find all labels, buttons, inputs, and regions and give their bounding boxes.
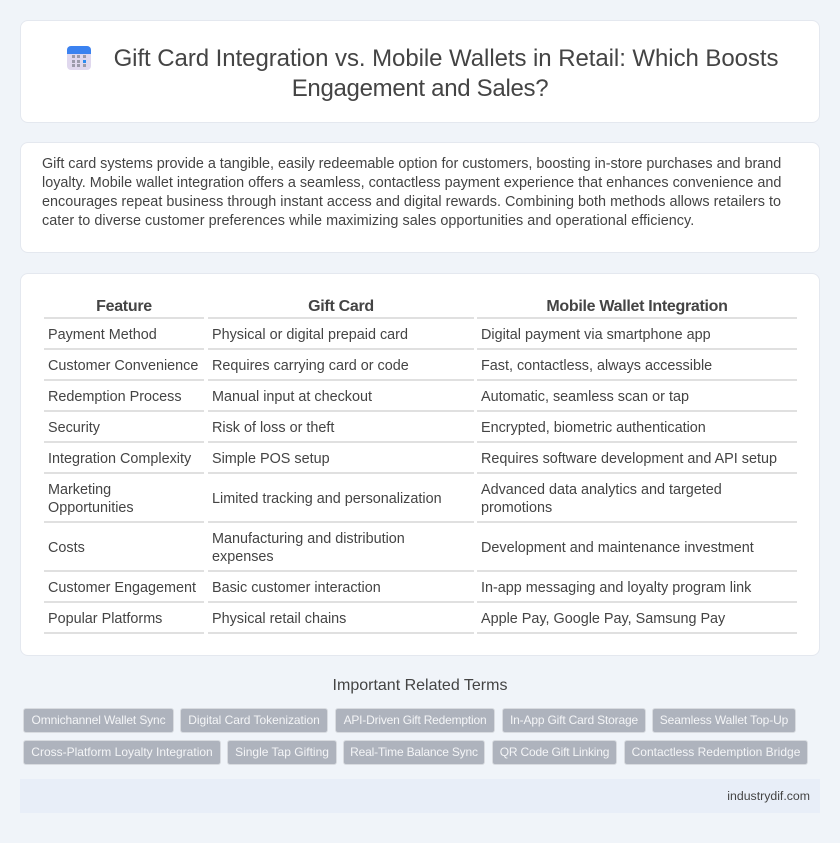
table rows: Risk of loss or theft	[212, 420, 334, 436]
intro paragraph: loyalty. Mobile wallet integration offers a seamless, contactless payment experience that enhances convenience and	[42, 175, 781, 191]
table rows: Security	[48, 420, 100, 436]
table rows: Simple POS setup	[212, 451, 330, 467]
table header: Gift Card	[308, 298, 374, 315]
table rows: Opportunities	[48, 500, 134, 516]
table rows: In-app messaging and loyalty program link	[481, 580, 751, 596]
related term tags: QR Code Gift Linking	[500, 745, 609, 759]
related term tags: Digital Card Tokenization	[188, 713, 320, 727]
panel: intro text	[20, 142, 820, 253]
related term tags: Single Tap Gifting	[235, 745, 329, 759]
panel: title card	[20, 20, 820, 123]
table rows: Apple Pay, Google Pay, Samsung Pay	[481, 611, 725, 627]
table rows: Requires software development and API setup	[481, 451, 777, 467]
table rows: Physical or digital prepaid card	[212, 327, 408, 343]
footer source: industrydif.com	[727, 789, 810, 803]
related term tags: API-Driven Gift Redemption	[344, 713, 486, 727]
table rows: Development and maintenance investment	[481, 540, 754, 556]
table rows: Manufacturing and distribution	[212, 531, 405, 547]
table rows: Automatic, seamless scan or tap	[481, 389, 689, 405]
intro paragraph: encourages repeat business through instant access and digital rewards. Combining both methods allows retailers to	[42, 194, 781, 210]
table rows: Customer Convenience	[48, 358, 198, 374]
table rows: Marketing	[48, 482, 111, 498]
table rows	[44, 317, 797, 634]
panel: comparison table	[20, 273, 820, 656]
related term tags	[23, 708, 808, 765]
table rows: Costs	[48, 540, 85, 556]
table rows: Integration Complexity	[48, 451, 191, 467]
related term tags: Omnichannel Wallet Sync	[32, 713, 165, 727]
table rows: Customer Engagement	[48, 580, 196, 596]
intro paragraph: Gift card systems provide a tangible, easily redeemable option for customers, boosting in-store purchases and brand	[42, 156, 781, 172]
table rows: Manual input at checkout	[212, 389, 372, 405]
intro paragraph	[42, 156, 781, 229]
title: Engagement and Sales?	[292, 75, 548, 102]
related term tags: Cross-Platform Loyalty Integration	[31, 745, 213, 759]
table rows: expenses	[212, 549, 274, 565]
table header: Mobile Wallet Integration	[546, 298, 728, 315]
table rows: Requires carrying card or code	[212, 358, 409, 374]
related term tags: In-App Gift Card Storage	[510, 713, 638, 727]
table rows: Advanced data analytics and targeted	[481, 482, 722, 498]
title	[114, 45, 778, 102]
table header	[96, 298, 728, 315]
title: Gift Card Integration vs. Mobile Wallets in Retail: Which Boosts	[114, 45, 778, 72]
table rows: Basic customer interaction	[212, 580, 381, 596]
table rows: Physical retail chains	[212, 611, 346, 627]
table rows: promotions	[481, 500, 552, 516]
related term tags: Contactless Redemption Bridge	[632, 745, 800, 759]
heading: related terms: Important Related Terms	[333, 677, 507, 694]
related term tags: Seamless Wallet Top-Up	[660, 713, 788, 727]
table rows: Redemption Process	[48, 389, 182, 405]
table rows: Payment Method	[48, 327, 157, 343]
table rows: Popular Platforms	[48, 611, 162, 627]
table rows: Fast, contactless, always accessible	[481, 358, 712, 374]
related term tags: Real-Time Balance Sync	[350, 745, 478, 759]
intro paragraph: cater to diverse customer preferences while maximizing sales opportunities and operational efficiency.	[42, 213, 694, 229]
footer bar	[20, 779, 820, 813]
table header: Feature	[96, 298, 152, 315]
table rows: Encrypted, biometric authentication	[481, 420, 706, 436]
table rows: Limited tracking and personalization	[212, 491, 442, 507]
table rows: Digital payment via smartphone app	[481, 327, 711, 343]
icon: calendar	[67, 46, 91, 70]
